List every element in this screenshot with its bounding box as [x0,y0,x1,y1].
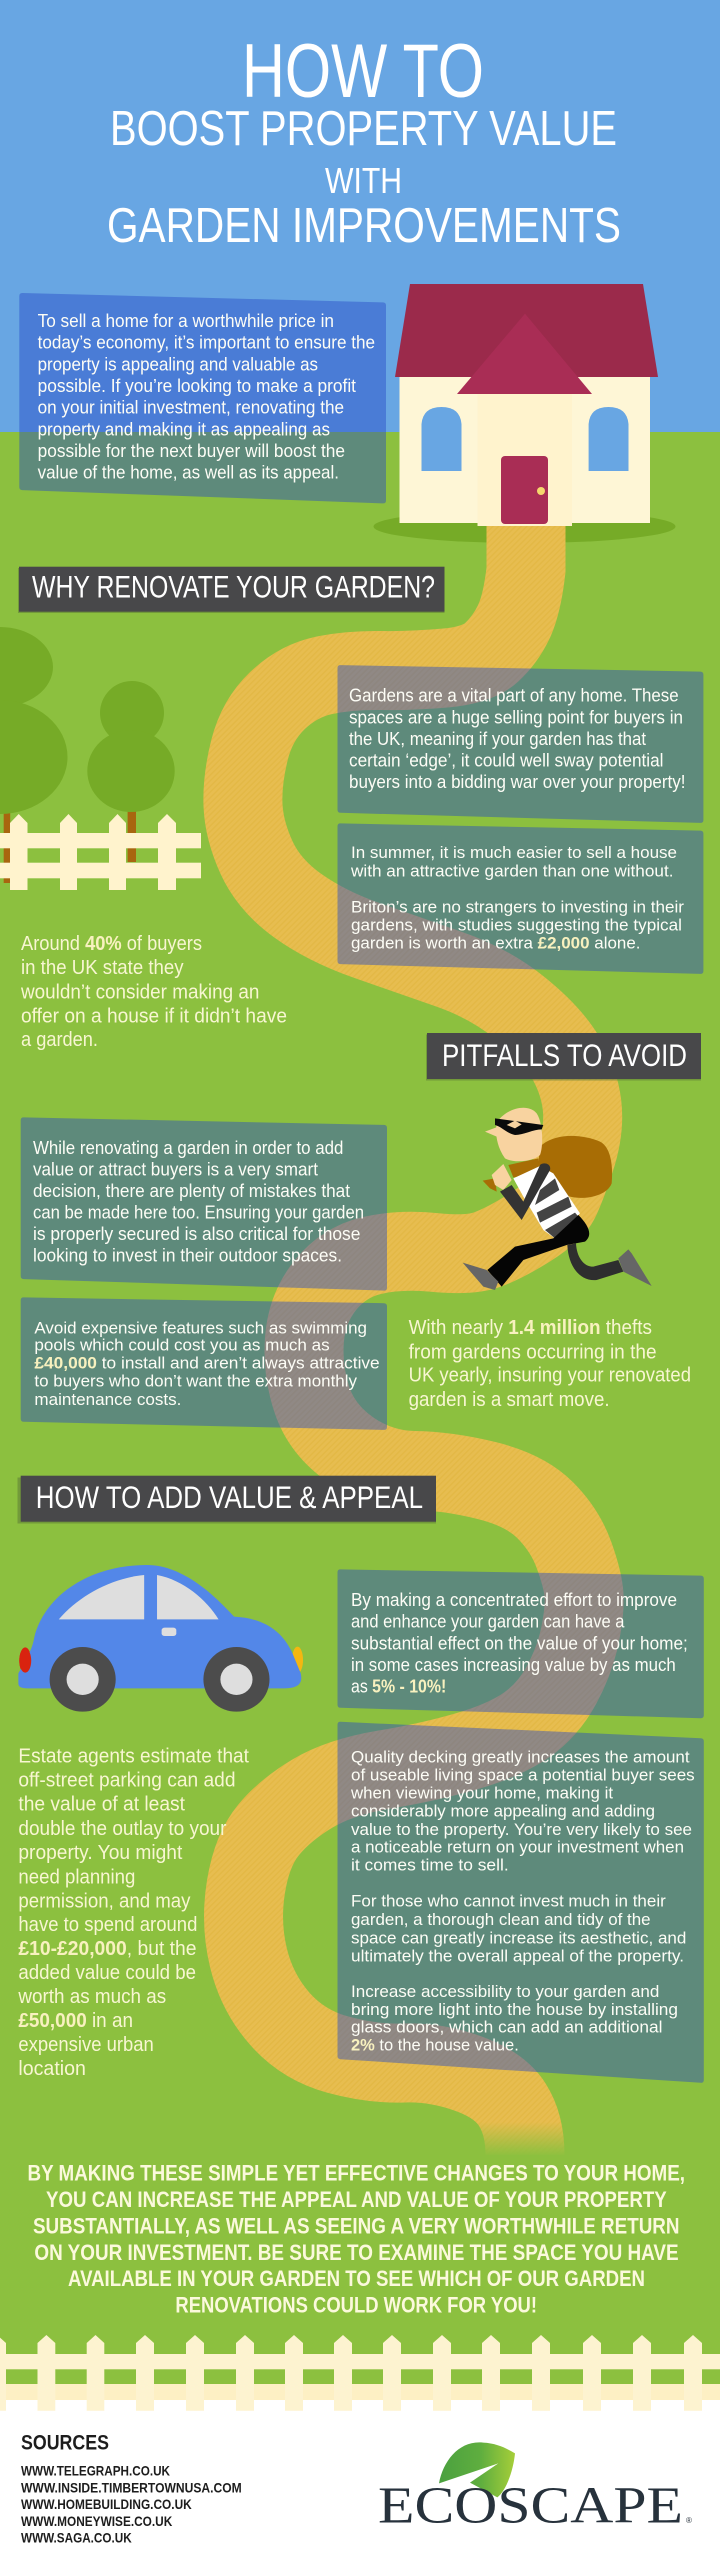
text: off-street parking: property. You might [18,1842,183,1864]
panel: gardens are vital: spaces are a huge selling point for buyers in [349,707,683,727]
intro text panel: property and making it as appealing as [38,419,330,439]
panel: summer sales [338,823,703,974]
text: off-street parking: off-street parking can add [18,1770,236,1792]
title: GARDEN IMPROVEMENTS [107,199,621,253]
panel: gardens are vital: certain ‘edge’, it could well sway potential [349,751,664,771]
conclusion text: RENOVATIONS COULD WORK FOR YOU! [175,2293,537,2318]
intro text panel: possible for the next buyer will boost the [38,441,345,461]
panel: decking and accessibility: For those who cannot invest much in their [351,1892,666,1911]
panel: summer sales: Briton’s are no strangers to investing in their [351,898,684,917]
panel: concentrated effort: as 5% - 10%! [351,1676,446,1696]
house lawn shadow [374,510,676,543]
text: off-street parking: the value of at least [18,1794,185,1816]
panel: decking and accessibility: Quality decking greatly increases the amount [351,1747,690,1766]
text: off-street parking: £50,000 in an [18,2010,133,2032]
logo: Ecoscape: ® [686,2516,692,2525]
trees [0,627,175,883]
sources list: WWW.INSIDE.TIMBERTOWNUSA.COM [21,2479,242,2495]
intro text panel: today’s economy, it’s important to ensure the [38,333,375,353]
stat: 40% of buyers: wouldn’t consider making an [20,981,259,1003]
panel: renovation mistakes: While renovating a garden in order to add [33,1138,343,1158]
background: grass [0,432,720,2400]
title: WITH [325,160,402,201]
panel: expensive features: £40,000 to install and aren’t always attractive [34,1354,380,1373]
panel: gardens are vital [338,665,703,823]
panel: renovation mistakes: value or attract buyers is a very smart [33,1160,318,1180]
text: off-street parking: Estate agents estimate that [18,1745,249,1767]
logo: Ecoscape: ECOSCAPE [378,2478,683,2534]
text: off-street parking: need planning [18,1866,135,1888]
panel: decking and accessibility: a noticeable return on your investment when [351,1838,684,1857]
panel: renovation mistakes: decision, there are plenty of mistakes that [33,1181,350,1201]
panel: decking and accessibility [338,1722,704,2083]
stat: 40% of buyers: in the UK state they [21,957,184,979]
sources list: WWW.SAGA.CO.UK [21,2530,132,2546]
stat: 1.4 million thefts: With nearly 1.4 million thefts [409,1317,652,1339]
panel: summer sales: In summer, it is much easier to sell a house [351,843,677,862]
heading: add value: HOW TO ADD VALUE & APPEAL [36,1479,423,1515]
panel: renovation mistakes: can be made here too. Ensuring your garden [33,1202,364,1222]
panel: decking and accessibility: of useable living space a potential buyer sees [351,1766,695,1785]
sources list: SOURCES [21,2430,109,2454]
footer picket fence [0,2335,720,2411]
panel: decking and accessibility: when viewing your home, making it [350,1784,613,1803]
text: off-street parking: permission, and may [18,1890,191,1912]
sources list: WWW.HOMEBUILDING.CO.UK [21,2496,192,2512]
panel: concentrated effort: substantial effect on the value of your home; [351,1633,688,1653]
stat: 1.4 million thefts: garden is a smart move. [409,1389,610,1411]
heading: add value [18,1476,436,1524]
logo: Ecoscape [378,2442,692,2534]
panel: concentrated effort: in some cases increasing value by as much [351,1655,676,1675]
panel: summer sales: gardens, with studies suggesting the typical [351,916,682,935]
intro text panel: To sell a home for a worthwhile price in [38,311,334,331]
panel: decking and accessibility: considerably more appealing and adding [351,1802,655,1821]
conclusion text [28,2161,685,2318]
panel: concentrated effort: By making a concentrated effort to improve [351,1590,677,1610]
panel: decking and accessibility: glass doors, which can add an additional [351,2018,662,2037]
heading: why renovate: WHY RENOVATE YOUR GARDEN? [32,569,435,605]
panel: decking and accessibility: space can greatly increase its aesthetic, and [351,1928,686,1947]
intro text panel: value of the home, as well as its appeal. [38,463,339,483]
stat: 40% of buyers: Around 40% of buyers [21,933,202,955]
stat: 40% of buyers: a garden. [21,1029,98,1051]
panel: expensive features: Avoid expensive features such as swimming [34,1318,367,1337]
house illustration [395,284,658,526]
panel: gardens are vital: buyers into a bidding war over your property! [349,772,686,792]
sources list: WWW.TELEGRAPH.CO.UK [21,2462,170,2478]
background: sky [0,0,720,432]
panel: expensive features: to buyers who don’t want the extra monthly [34,1372,357,1391]
panel: concentrated effort: and enhance your garden can have a [351,1612,625,1632]
panel: decking and accessibility: it comes time to sell. [351,1856,509,1875]
stat: 1.4 million thefts: from gardens occurring in the [409,1341,657,1363]
title: HOW TO [242,29,484,114]
panel: expensive features: pools which could cost you as much as [34,1336,330,1355]
panel: expensive features: maintenance costs. [34,1390,181,1409]
text: off-street parking: location [18,2058,86,2080]
panel: gardens are vital: the UK, meaning if your garden has that [349,729,646,749]
panel: renovation mistakes: looking to invest in their outdoor spaces. [33,1246,342,1266]
intro text panel: possible. If you’re looking to make a profit [38,376,356,396]
text: off-street parking: added value could be [18,1962,196,1984]
panel: decking and accessibility: bring more light into the house by installing [351,2000,678,2019]
icon: blue car [18,1565,303,1712]
panel: concentrated effort [338,1569,704,1718]
panel: gardens are vital: Gardens are a vital part of any home. These [349,686,679,706]
text: off-street parking: £10-£20,000, but the [18,1938,197,1960]
panel: decking and accessibility: garden, a thorough clean and tidy of the [351,1910,651,1929]
text: off-street parking: expensive urban [18,2034,154,2056]
panel: decking and accessibility: ultimately the overall appeal of the property. [351,1946,684,1965]
intro text panel [19,293,386,503]
title: BOOST PROPERTY VALUE [110,102,617,156]
text: off-street parking: double the outlay to your [18,1818,227,1840]
icon: running burglar with sack [463,1108,652,1290]
text: off-street parking [17,1745,249,2080]
stat: 1.4 million thefts [409,1317,691,1411]
stat: 1.4 million thefts: UK yearly, insuring your renovated [409,1365,691,1387]
title [107,29,621,253]
sources list: WWW.MONEYWISE.CO.UK [21,2513,172,2529]
panel: renovation mistakes: is properly secured is also critical for those [33,1224,360,1244]
sources list [21,2430,242,2546]
panel: summer sales: garden is worth an extra £2,000 alone. [351,933,640,952]
panel: expensive features [21,1297,387,1430]
stat: 40% of buyers: offer on a house if it didn’t have [21,1006,287,1028]
panel: decking and accessibility: Increase accessibility to your garden and [351,1982,659,2001]
panel: decking and accessibility: value to the property. You’re very likely to see [351,1820,692,1839]
panel: decking and accessibility: 2% to the house value. [351,2036,519,2055]
stat: 40% of buyers [20,933,287,1051]
intro text panel: on your initial investment, renovating the [38,398,344,418]
winding garden path [243,520,584,2156]
background: footer [0,2400,720,2560]
heading: why renovate [18,567,444,613]
white picket fence [0,814,201,890]
heading: pitfalls [426,1033,701,1080]
text: off-street parking: worth as much as [17,1986,166,2008]
panel: summer sales: with an attractive garden than one without. [350,862,674,881]
panel: renovation mistakes [21,1117,387,1291]
text: off-street parking: have to spend around [18,1914,197,1936]
intro text panel: property is appealing and valuable as [38,354,318,374]
